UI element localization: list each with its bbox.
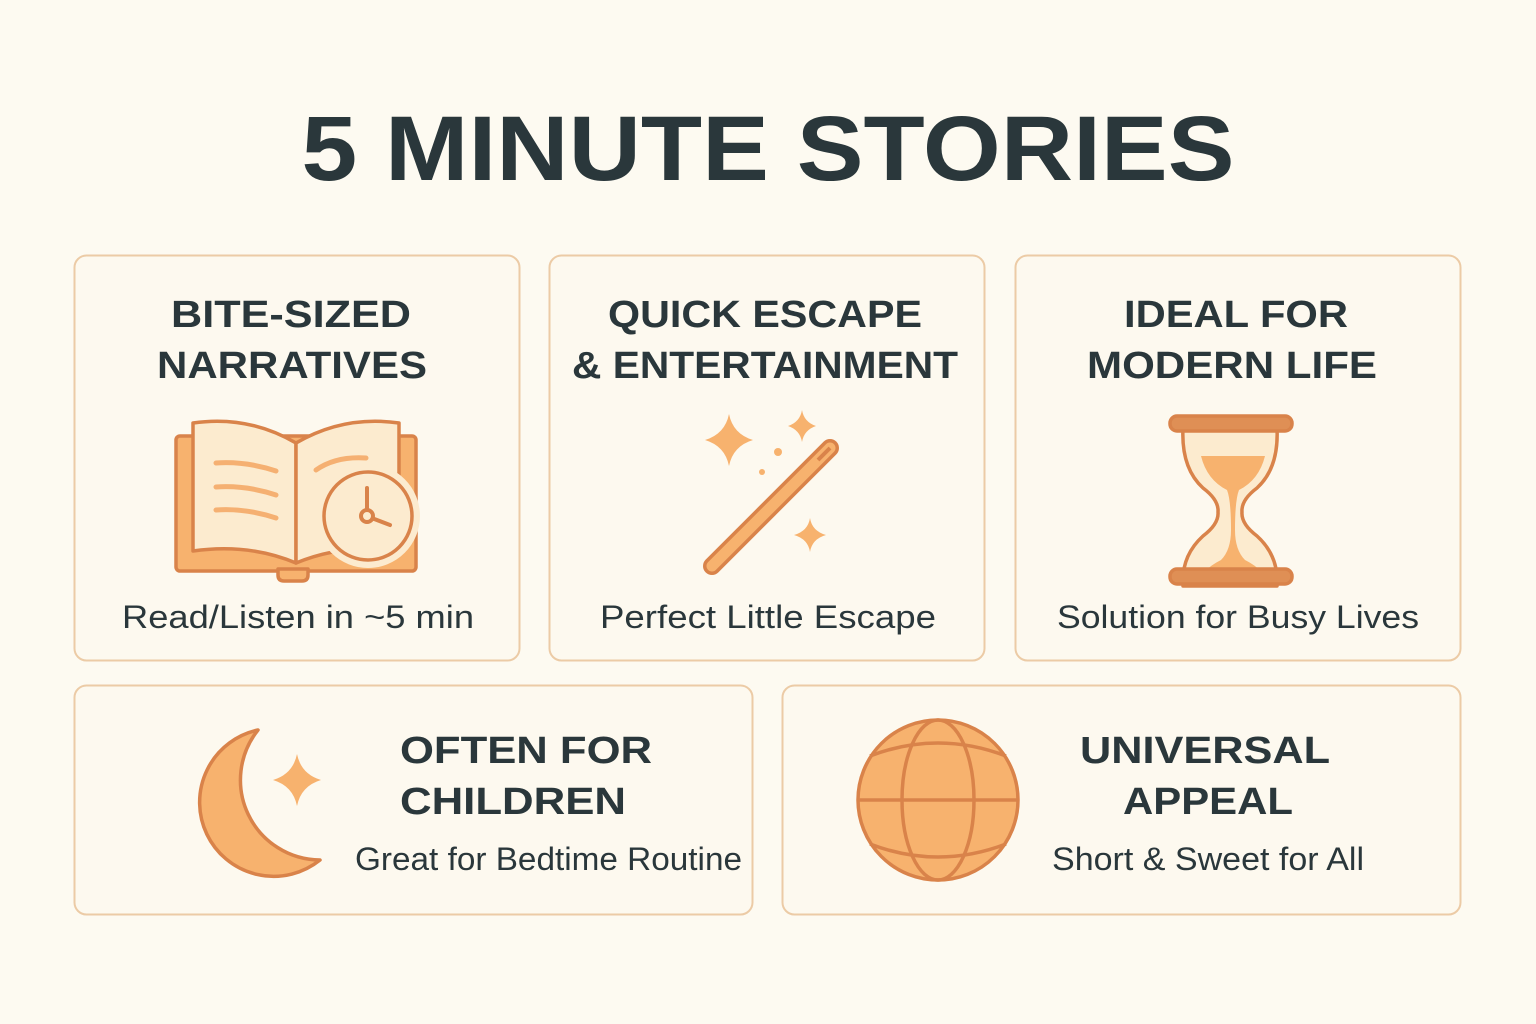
heading: often for children: [400, 730, 652, 823]
subtitle: bedtime: Great for Bedtime Routine: [355, 841, 742, 877]
heading: ideal for modern life: IDEAL FOR: [1124, 294, 1348, 336]
icon: magic wand: [705, 410, 830, 566]
icon: book with clock: [176, 421, 416, 581]
subtitle: busy lives: Solution for Busy Lives: [1057, 599, 1419, 635]
icon: hourglass: [1170, 416, 1292, 586]
subtitle: read/listen: Read/Listen in ~5 min: [122, 599, 474, 635]
heading: bite-sized: BITE-SIZED: [171, 294, 411, 336]
heading: often for children: OFTEN FOR: [400, 730, 652, 772]
panel: children: [74, 686, 752, 914]
panel: modern life: [1016, 256, 1460, 660]
panel: quick escape: [550, 256, 984, 660]
heading: ideal for modern life: [1087, 294, 1377, 387]
icon: moon and star: [200, 730, 321, 876]
icon: globe: [858, 720, 1018, 880]
heading: universal appeal: APPEAL: [1123, 781, 1293, 823]
heading: quick escape: & ENTERTAINMENT: [572, 345, 958, 387]
heading: quick escape: QUICK ESCAPE: [608, 294, 922, 336]
heading: quick escape: [572, 294, 958, 387]
heading: bite-sized: [157, 294, 427, 387]
title: 5 MINUTE STORIES: [302, 98, 1234, 200]
subtitle: perfect little escape: Perfect Little Escape: [600, 599, 936, 635]
heading: universal appeal: UNIVERSAL: [1080, 730, 1330, 772]
heading: bite-sized: NARRATIVES: [157, 345, 427, 387]
subtitle: short & sweet: Short & Sweet for All: [1052, 841, 1364, 877]
heading: ideal for modern life: MODERN LIFE: [1087, 345, 1377, 387]
panel: universal appeal: [782, 686, 1460, 914]
heading: universal appeal: [1080, 730, 1330, 823]
panel: bite-sized narratives: [74, 256, 520, 660]
heading: often for children: CHILDREN: [400, 781, 626, 823]
